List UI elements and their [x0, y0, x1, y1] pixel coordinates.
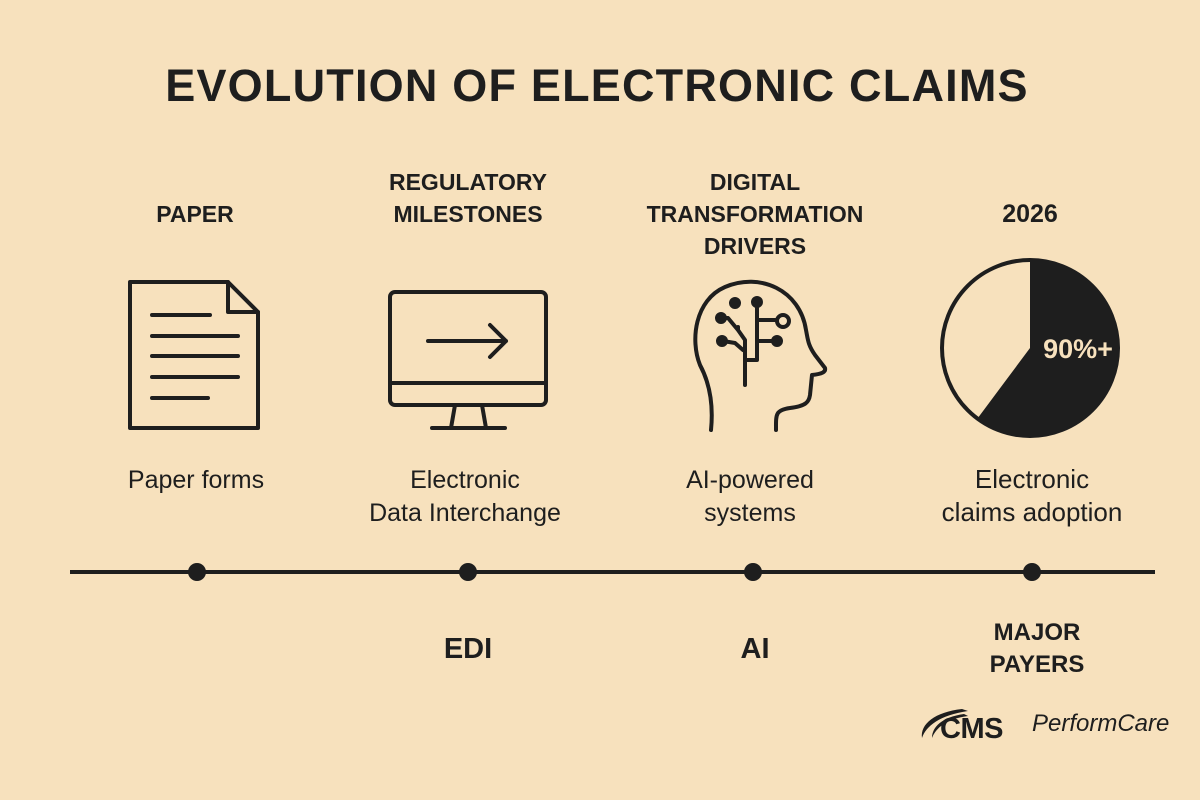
chart: pie 90%+	[942, 260, 1118, 436]
text: adoption: Electronic	[975, 464, 1089, 494]
title: EVOLUTION OF ELECTRONIC CLAIMS	[165, 60, 1029, 111]
logo: PerformCare: PerformCare	[1032, 710, 1169, 737]
text: adoption: claims adoption	[942, 497, 1122, 527]
heading: paper: PAPER	[156, 201, 234, 227]
heading: digital transformation drivers	[647, 169, 863, 259]
icon: AI head	[695, 282, 825, 430]
logo: CMS: CMS	[940, 713, 1003, 745]
heading: regulatory milestones: REGULATORY	[389, 169, 547, 195]
text: paper forms: Paper forms	[128, 466, 264, 494]
logo: CMS	[922, 709, 1003, 745]
heading: digital transformation drivers: DRIVERS	[704, 233, 806, 259]
text: EDI: Data Interchange	[369, 499, 561, 527]
heading: 2026: 2026	[1002, 200, 1058, 228]
icon: monitor with arrow	[390, 292, 546, 428]
text: EDI: Electronic	[410, 466, 520, 494]
text: AI-powered: AI-powered	[686, 466, 814, 494]
timeline label: major payers: PAYERS	[990, 651, 1084, 678]
text: adoption	[942, 464, 1122, 527]
heading: regulatory milestones	[389, 169, 547, 227]
heading: digital transformation drivers: DIGITAL	[710, 169, 800, 195]
heading: regulatory milestones: MILESTONES	[393, 201, 543, 227]
timeline	[70, 563, 1155, 581]
icon: paper document	[130, 282, 258, 428]
timeline label: EDI: EDI	[444, 633, 492, 665]
heading: digital transformation drivers: TRANSFORMATION	[647, 201, 863, 227]
timeline label: major payers: MAJOR	[994, 619, 1080, 646]
timeline label: AI: AI	[740, 633, 770, 665]
text: AI-powered: systems	[704, 499, 796, 527]
text: AI-powered	[686, 466, 814, 527]
text: EDI	[369, 466, 561, 527]
chart: pie 90%+: 90%+	[1043, 334, 1113, 364]
timeline label: major payers	[990, 619, 1084, 678]
